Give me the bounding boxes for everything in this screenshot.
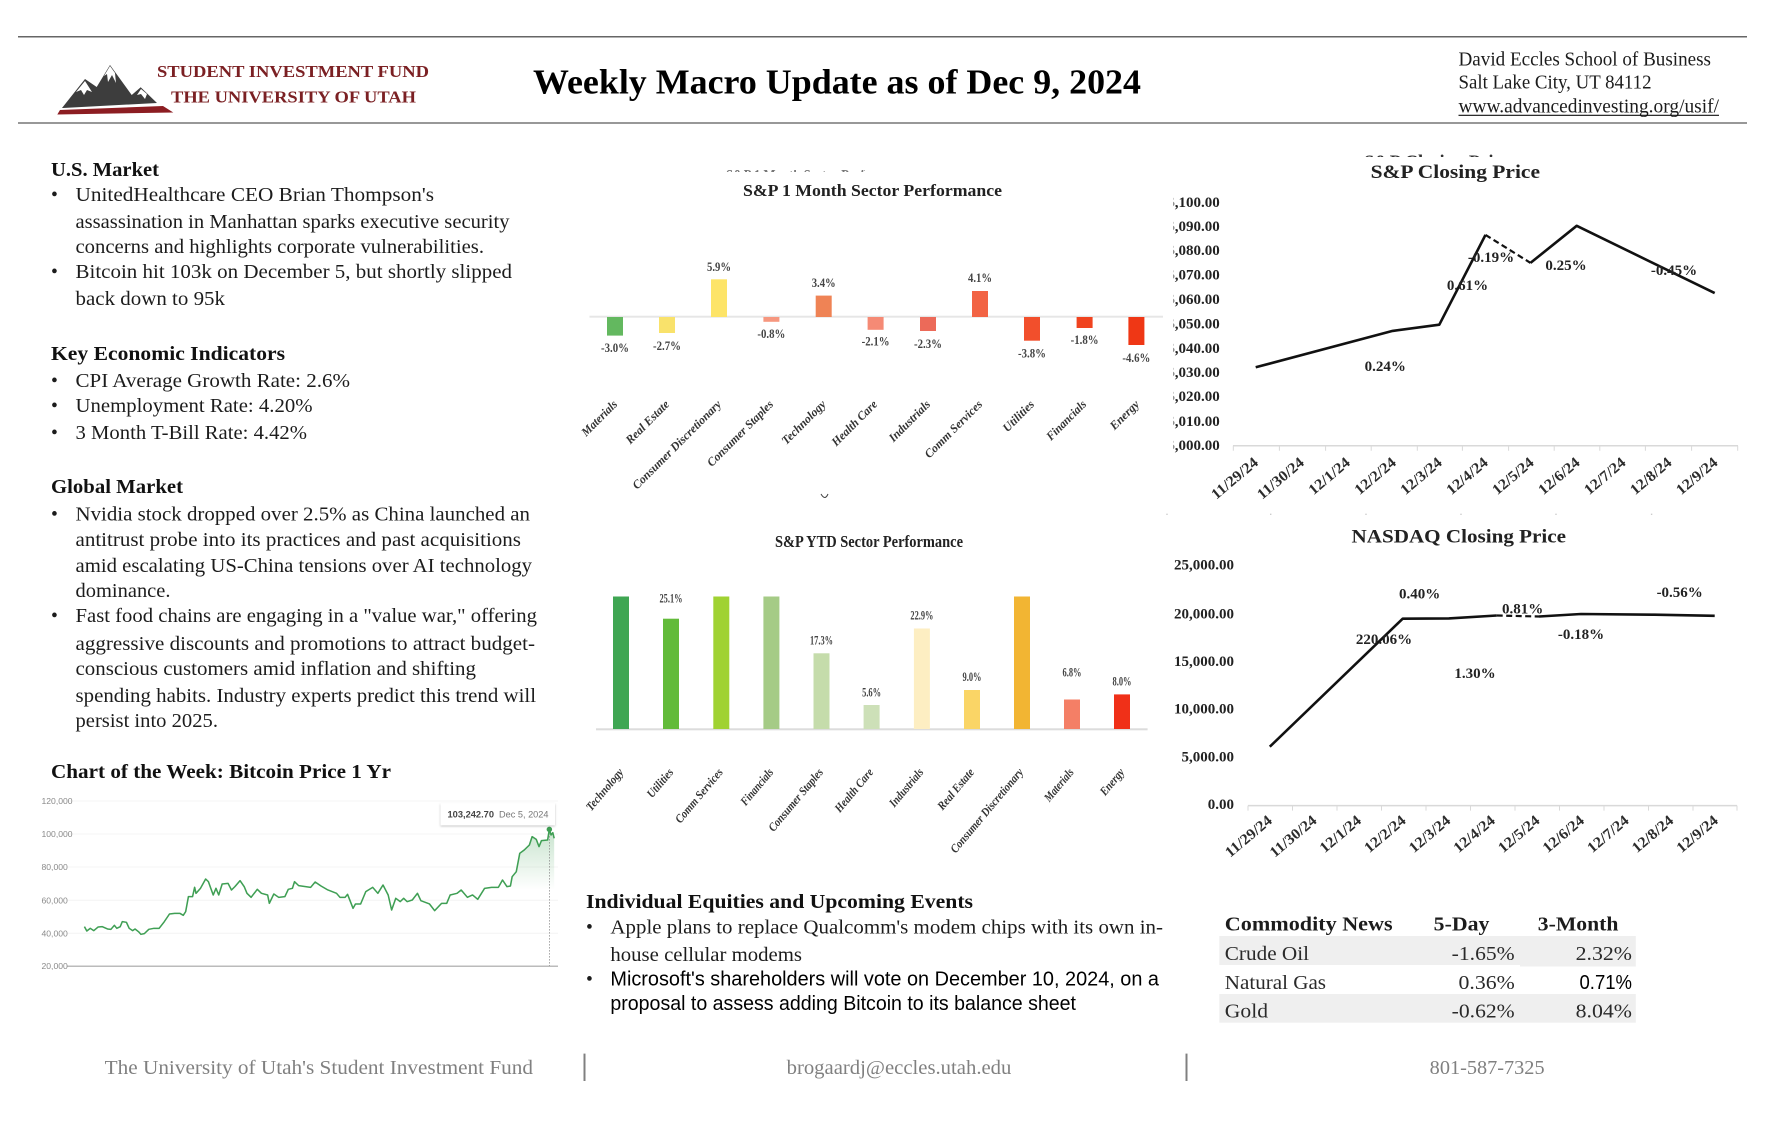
bullet: Bitcoin bbox=[51, 262, 512, 310]
bar chart: YTD: Materials bbox=[1040, 765, 1077, 805]
line chart: S&P bbox=[1167, 195, 1738, 515]
line chart: NASDAQ: 12/2/24 bbox=[1362, 812, 1410, 857]
line chart: S&P: 12/8/24 bbox=[1627, 454, 1676, 499]
line chart: NASDAQ: 0.81% bbox=[1502, 602, 1543, 618]
bar chart: 1 month: -3.8% bbox=[1018, 346, 1046, 360]
panel: S&P 1 Month Sector Performance bbox=[578, 166, 1163, 498]
line chart: NASDAQ: -0.56% bbox=[1657, 585, 1703, 601]
bar chart: YTD: 8.0% bbox=[1112, 675, 1132, 689]
bar chart: 1 month: -0.8% bbox=[757, 327, 785, 341]
bullet: Bitcoin: back down to 95k bbox=[76, 289, 225, 310]
line chart: NASDAQ: 25,000.00 bbox=[1174, 557, 1234, 573]
line chart: S&P: 0.61% bbox=[1447, 278, 1488, 294]
bullet: UnitedHealthcare: UnitedHealthcare CEO Brian Thompson's bbox=[76, 185, 434, 206]
panel: U.S. Market bbox=[51, 160, 512, 310]
address block: Salt Lake City, UT 84112 bbox=[1458, 72, 1652, 93]
bullet: Fast food: conscious customers amid inflation and shifting bbox=[76, 659, 476, 680]
address block: David Eccles School of Business bbox=[1458, 50, 1711, 70]
bullet: Bitcoin: Bitcoin hit 103k on December 5, but shortly slipped bbox=[76, 262, 512, 283]
line chart: NASDAQ: 12/8/24 bbox=[1629, 812, 1677, 857]
bar chart: 1 month: 3.4% bbox=[812, 276, 836, 290]
indicator list: 3 Month T-Bill Rate: 4.42% bbox=[76, 423, 307, 444]
indicator list: • bbox=[51, 423, 58, 444]
line chart: NASDAQ: 12/6/24 bbox=[1540, 812, 1588, 857]
tooltip: 103,242.70 bbox=[448, 809, 494, 819]
bullet: Nvidia: antitrust probe into its practices and past acquisitions bbox=[76, 530, 521, 551]
heading: S&P 1 Month: S&P 1 Month Sector Performance bbox=[743, 181, 1002, 200]
footer: 801-587-7325 bbox=[1430, 1057, 1545, 1079]
line chart: NASDAQ: 12/7/24 bbox=[1585, 812, 1633, 857]
heading: Chart of the Week: Chart of the Week: Bitcoin Price 1 Yr bbox=[51, 762, 391, 783]
line chart: S&P: 0.24% bbox=[1365, 359, 1406, 375]
row: Natural Gas: Natural Gas bbox=[1225, 972, 1326, 994]
bar chart: YTD: Technology bbox=[583, 765, 627, 813]
bar chart: YTD: Industrials bbox=[885, 765, 926, 810]
line chart: NASDAQ: 20,000.00 bbox=[1174, 607, 1234, 623]
panel: Global Market bbox=[51, 477, 537, 732]
logo text bbox=[157, 62, 429, 107]
bullet: UnitedHealthcare: assassination in Manhattan sparks executive security bbox=[76, 212, 510, 233]
indicator list: • bbox=[51, 396, 58, 417]
row: Natural Gas: 0.36% bbox=[1458, 972, 1515, 994]
bullet: Bitcoin: • bbox=[51, 262, 58, 283]
bullet: Fast food bbox=[51, 606, 537, 732]
line chart: NASDAQ: 5,000.00 bbox=[1182, 750, 1234, 766]
bar chart: 1 month: Materials bbox=[578, 397, 620, 440]
line chart: S&P: 6,030.00 bbox=[1167, 365, 1220, 381]
heading: U.S. Market: U.S. Market bbox=[51, 160, 159, 181]
bullet: Nvidia: amid escalating US-China tensions over AI technology bbox=[76, 556, 532, 577]
line chart: Bitcoin price: 40,000 bbox=[42, 928, 68, 938]
line chart: NASDAQ: 12/1/24 bbox=[1317, 812, 1365, 857]
bullet: Apple: • bbox=[586, 918, 593, 939]
bar chart: YTD: Comm Services bbox=[672, 765, 726, 826]
line chart: NASDAQ: -0.18% bbox=[1558, 627, 1604, 643]
panel: Chart of the Week bbox=[42, 762, 558, 971]
bar chart: 1 month: Health Care bbox=[828, 397, 881, 450]
cropped ghost title: S&P Closing Price bbox=[1364, 153, 1510, 173]
bar chart: 1 month bbox=[578, 260, 1163, 492]
tooltip: Dec 5, 2024 bbox=[499, 809, 548, 819]
line chart: S&P: 6,020.00 bbox=[1167, 389, 1220, 405]
bullet: Fast food: spending habits. Industry experts predict this trend will bbox=[76, 686, 537, 707]
bar chart: 1 month: Comm Services bbox=[921, 397, 985, 461]
bullet: Nvidia: dominance. bbox=[76, 581, 170, 602]
bar chart: 1 month: Consumer Discretionary bbox=[629, 397, 725, 492]
line chart: S&P: 6,010.00 bbox=[1167, 414, 1220, 430]
cropped glyph fragment bbox=[821, 494, 828, 498]
line chart: S&P: 12/3/24 bbox=[1398, 454, 1446, 499]
line chart: S&P: 12/5/24 bbox=[1490, 454, 1538, 499]
row: Gold bbox=[1225, 1001, 1632, 1023]
line chart: S&P: -0.19% bbox=[1468, 250, 1514, 266]
bar chart: YTD: 9.0% bbox=[962, 670, 982, 684]
bullet: Apple: house cellular modems bbox=[610, 945, 802, 966]
bullet: UnitedHealthcare: • bbox=[51, 185, 58, 206]
line chart: NASDAQ: 1.30% bbox=[1454, 666, 1496, 682]
line chart: NASDAQ: 15,000.00 bbox=[1174, 654, 1234, 670]
line chart: S&P: -0.45% bbox=[1651, 263, 1697, 279]
bar chart: YTD: 22.9% bbox=[910, 608, 933, 622]
bar chart: 1 month: Consumer Staples bbox=[704, 397, 776, 469]
line chart: S&P: 6,100.00 bbox=[1167, 195, 1220, 211]
line chart: NASDAQ: 11/29/24 bbox=[1222, 812, 1276, 861]
tooltip bbox=[440, 803, 555, 825]
bar chart: 1 month: Utilities bbox=[1000, 397, 1037, 435]
line chart: Bitcoin price: 20,000 bbox=[42, 961, 68, 971]
bar chart: YTD: Consumer Staples bbox=[765, 765, 826, 834]
bar chart: YTD bbox=[583, 592, 1148, 856]
line chart: S&P: 12/4/24 bbox=[1444, 454, 1492, 499]
indicator list: • bbox=[51, 371, 58, 392]
bar chart: 1 month: -2.3% bbox=[914, 337, 942, 351]
indicator list bbox=[51, 371, 350, 444]
bar chart: YTD: 5.6% bbox=[862, 686, 881, 700]
heading: S&P YTD: S&P YTD Sector Performance bbox=[775, 532, 963, 551]
bar chart: 1 month: Financials bbox=[1042, 397, 1089, 444]
heading: Global Market: Global Market bbox=[51, 477, 184, 498]
bullet: Nvidia: • bbox=[51, 505, 58, 526]
bullet: Fast food: Fast food chains are engaging in a "value war," offering bbox=[76, 606, 537, 627]
line chart: Bitcoin price: 120,000 bbox=[42, 796, 73, 806]
icon: mountain bbox=[57, 65, 173, 114]
indicator list: CPI Average Growth Rate: 2.6% bbox=[76, 371, 350, 392]
logo text: THE UNIVERSITY OF UTAH bbox=[171, 88, 416, 107]
line chart: S&P: 6,000.00 bbox=[1167, 438, 1220, 454]
bullet: Nvidia bbox=[51, 505, 532, 602]
bar chart: 1 month: Industrials bbox=[885, 397, 933, 445]
bar chart: 1 month: Real Estate bbox=[622, 397, 673, 447]
bar chart: YTD: Health Care bbox=[831, 765, 877, 816]
table header: Commodity News bbox=[1225, 914, 1393, 936]
panel: Individual Equities and Upcoming Events bbox=[586, 892, 1163, 1015]
bar chart: YTD: 25.1% bbox=[660, 592, 682, 606]
bullet: Fast food: aggressive discounts and promotions to attract budget- bbox=[76, 634, 535, 655]
line chart: S&P: 6,070.00 bbox=[1167, 268, 1220, 284]
row: Gold: Gold bbox=[1225, 1001, 1268, 1023]
cropped ghost title: S&P 1 Month Sector Performance bbox=[726, 166, 912, 185]
bar chart: YTD: Real Estate bbox=[934, 765, 977, 813]
line chart: S&P: 12/9/24 bbox=[1673, 454, 1722, 499]
line chart: NASDAQ: 12/9/24 bbox=[1674, 812, 1722, 857]
bar chart: 1 month: 4.1% bbox=[968, 271, 992, 285]
table header: 5-Day bbox=[1434, 914, 1489, 936]
table header: 3-Month bbox=[1538, 914, 1618, 936]
line chart: NASDAQ: 0.00 bbox=[1208, 797, 1234, 813]
line chart: S&P: 6,050.00 bbox=[1167, 317, 1220, 333]
heading: Key Economic Indicators: Key Economic Indicators bbox=[51, 344, 285, 365]
panel: S&P YTD Sector Performance bbox=[583, 532, 1148, 856]
line chart: NASDAQ: 0.40% bbox=[1399, 586, 1440, 602]
bullet: Fast food: persist into 2025. bbox=[76, 711, 218, 732]
line chart: NASDAQ: 12/3/24 bbox=[1406, 812, 1454, 857]
line chart: NASDAQ: 12/4/24 bbox=[1451, 812, 1499, 857]
title: Weekly Macro Update as of Dec 9, 2024 bbox=[533, 62, 1141, 102]
line chart: S&P: 0.25% bbox=[1545, 258, 1587, 274]
line chart: S&P: 11/30/24 bbox=[1254, 454, 1308, 503]
line chart: S&P: 12/1/24 bbox=[1306, 454, 1354, 499]
bar chart: 1 month: -1.8% bbox=[1071, 333, 1099, 347]
row: Crude Oil: 2.32% bbox=[1576, 943, 1632, 965]
line chart: S&P: 6,040.00 bbox=[1167, 341, 1220, 357]
header rules and banner bbox=[18, 37, 1747, 123]
address block bbox=[1458, 50, 1720, 118]
bar chart: 1 month: Energy bbox=[1106, 397, 1143, 433]
bullet: Microsoft bbox=[586, 968, 1160, 1015]
bar chart: YTD: Energy bbox=[1096, 765, 1128, 799]
bar chart: 1 month: Technology bbox=[779, 397, 829, 447]
heading: NASDAQ Closing Price: NASDAQ Closing Price bbox=[1352, 526, 1566, 548]
bar chart: 1 month: -2.7% bbox=[653, 339, 681, 353]
bullet: Apple: Apple plans to replace Qualcomm's modem chips with its own in- bbox=[610, 918, 1163, 939]
line chart: NASDAQ bbox=[1174, 557, 1737, 861]
line chart: Bitcoin price: 100,000 bbox=[42, 829, 73, 839]
logo text: STUDENT INVESTMENT FUND bbox=[157, 62, 429, 81]
bullet: Nvidia: Nvidia stock dropped over 2.5% as China launched an bbox=[76, 505, 530, 526]
row: Natural Gas: 0.71% bbox=[1580, 972, 1632, 994]
line chart: S&P: 11/29/24 bbox=[1208, 454, 1262, 503]
row: Gold: 8.04% bbox=[1576, 1001, 1632, 1023]
line chart: S&P: 12/7/24 bbox=[1581, 454, 1630, 499]
row: Crude Oil: Crude Oil bbox=[1225, 943, 1309, 965]
heading: Individual Equities: Individual Equities and Upcoming Events bbox=[586, 892, 973, 913]
bar chart: 1 month: -3.0% bbox=[601, 341, 629, 355]
bar chart: YTD: Utilities bbox=[644, 765, 676, 800]
indicator list: Unemployment Rate: 4.20% bbox=[76, 396, 312, 417]
line chart: NASDAQ: 11/30/24 bbox=[1267, 812, 1321, 861]
heading: S&P Closing Price: S&P Closing Price bbox=[1371, 162, 1540, 183]
logo: Student Investment Fund bbox=[57, 62, 429, 114]
line chart: S&P: 6,090.00 bbox=[1167, 219, 1220, 235]
bullet: Fast food: • bbox=[51, 606, 58, 627]
bullet: UnitedHealthcare: concerns and highlights corporate vulnerabilities. bbox=[76, 237, 484, 258]
line chart: NASDAQ: 10,000.00 bbox=[1174, 702, 1234, 718]
bar chart: 1 month: 5.9% bbox=[707, 260, 731, 274]
bar chart: YTD: 6.8% bbox=[1062, 666, 1082, 680]
panel: S&P Closing Price bbox=[1167, 153, 1738, 515]
line chart: Bitcoin price: 60,000 bbox=[42, 895, 68, 905]
row: Crude Oil: -1.65% bbox=[1452, 943, 1515, 965]
line chart: Bitcoin price: 80,000 bbox=[42, 862, 68, 872]
panel: Commodity News table bbox=[1219, 914, 1636, 1023]
bar chart: 1 month: -2.1% bbox=[862, 334, 890, 348]
line chart: NASDAQ: 12/5/24 bbox=[1495, 812, 1544, 857]
bar chart: 1 month: -4.6% bbox=[1122, 351, 1150, 365]
address block: www.advancedinvesting.org/usif/ bbox=[1458, 97, 1720, 118]
line chart: NASDAQ: 220.06% bbox=[1356, 632, 1412, 648]
bar chart: YTD: Financials bbox=[737, 765, 776, 809]
footer: brogaardj@eccles.utah.edu bbox=[787, 1057, 1011, 1079]
bullet: Apple bbox=[586, 918, 1163, 966]
line chart: Bitcoin price bbox=[42, 796, 558, 971]
bullet: Microsoft: • bbox=[586, 970, 593, 991]
line chart: S&P: 6,080.00 bbox=[1167, 243, 1220, 259]
row: Crude Oil bbox=[1225, 943, 1632, 965]
line chart: S&P: 6,060.00 bbox=[1167, 292, 1220, 308]
row: Natural Gas bbox=[1225, 972, 1632, 994]
row: Gold: -0.62% bbox=[1452, 1001, 1515, 1023]
bullet: Microsoft: Microsoft's shareholders will vote on December 10, 2024, on a bbox=[610, 968, 1160, 991]
bullet: UnitedHealthcare bbox=[51, 185, 510, 258]
bar chart: YTD: Consumer Discretionary bbox=[947, 765, 1026, 856]
bar chart: YTD: 17.3% bbox=[810, 634, 833, 648]
line chart: S&P: 12/6/24 bbox=[1536, 454, 1584, 499]
panel: NASDAQ Closing Price bbox=[1174, 526, 1737, 861]
footer bbox=[105, 1054, 1545, 1081]
line chart: S&P: 12/2/24 bbox=[1352, 454, 1400, 499]
panel: Key Economic Indicators bbox=[51, 344, 350, 444]
table header bbox=[1225, 914, 1618, 936]
bullet: Microsoft: proposal to assess adding Bitcoin to its balance sheet bbox=[610, 992, 1076, 1015]
footer: The University of Utah's Student Investment Fund bbox=[105, 1057, 533, 1079]
